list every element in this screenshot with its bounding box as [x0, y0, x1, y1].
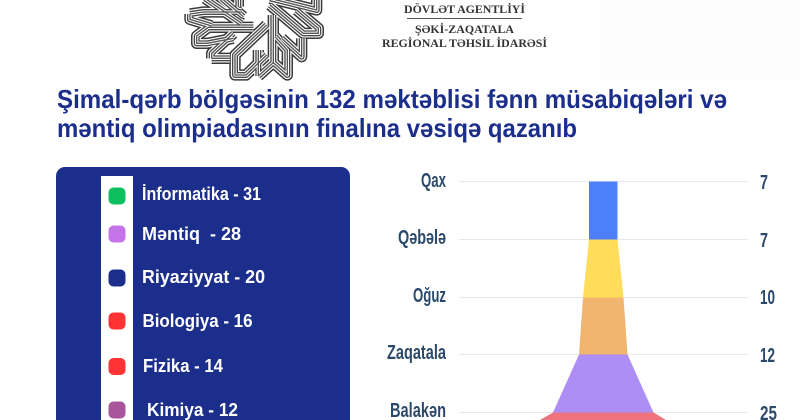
region labels: Qax: [421, 170, 446, 192]
panel: subject legend: [56, 167, 350, 420]
legend item: Informatika: [108, 184, 261, 204]
header: agency name: [382, 2, 547, 50]
legend item: Biologiya: Biologiya - 16: [142, 311, 252, 331]
region values: [760, 172, 777, 420]
legend item: Informatika: İnformatika - 31: [142, 184, 261, 204]
region labels: [387, 170, 447, 420]
region labels: Zaqatala: [387, 342, 447, 364]
legend item: Fizika: Fizika - 14: [143, 356, 223, 376]
legend item: Kimiya: Kimiya - 12: [147, 400, 238, 420]
legend item: Kimiya: [108, 400, 238, 420]
legend item: Riyaziyyat: Riyaziyyat - 20: [142, 267, 265, 287]
region values: 7: [760, 172, 768, 194]
header: agency name: DÖVLƏT AGENTLİYİ: [404, 2, 525, 16]
legend item: Mentiq: Məntiq - 28: [142, 224, 241, 244]
title: Şimal-qərb bölgəsinin 132 məktəblisi fənn müsabiqələri və: [57, 84, 727, 114]
title: [57, 84, 727, 143]
logo: snowflake emblem: [190, 0, 318, 76]
region labels: Qəbələ: [398, 227, 446, 249]
funnel chart: [540, 182, 666, 420]
title: məntiq olimpiadasının finalına vəsiqə qazanıb: [57, 113, 577, 143]
region values: 7: [760, 230, 768, 252]
region values: 10: [760, 287, 775, 309]
region labels: Oğuz: [413, 285, 446, 307]
legend item: Fizika: [108, 356, 223, 376]
header: agency name: REGİONAL TƏHSİL İDARƏSİ: [382, 36, 547, 50]
header: agency name: ŞƏKİ-ZAQATALA: [415, 22, 514, 36]
region values: 12: [760, 345, 775, 367]
